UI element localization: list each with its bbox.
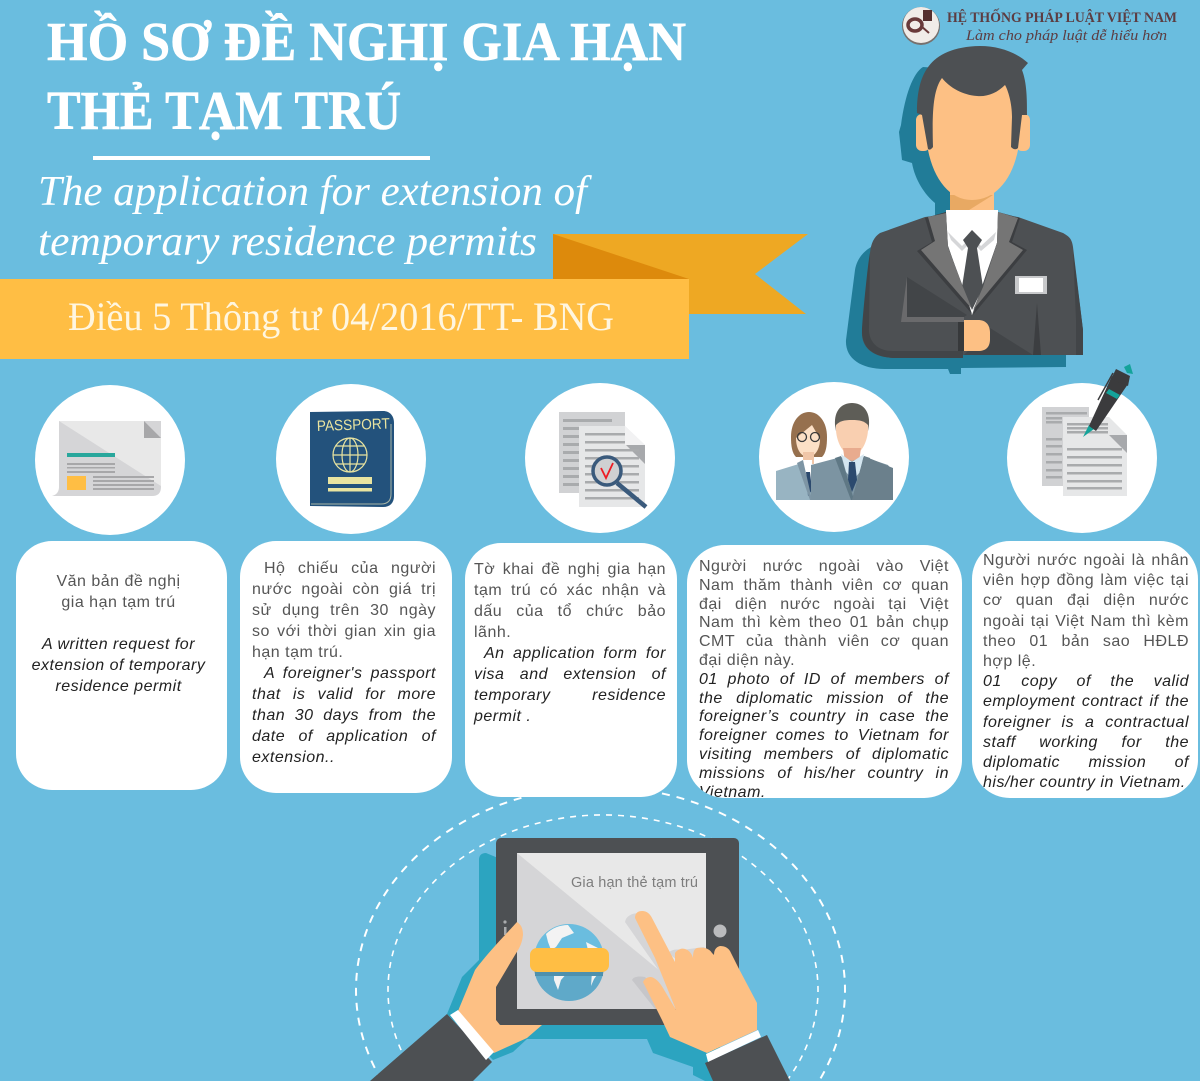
card 2 text: hạn tạm trú.: [252, 644, 343, 661]
passport booklet: PASSPORT: [317, 415, 390, 435]
card 5 text: ngoài tại Việt Nam thì kèm: [983, 613, 1189, 630]
man jacket: [862, 211, 1083, 358]
card 2 text: so với thời gian xin gia: [252, 623, 436, 640]
document: [52, 421, 161, 496]
card 2 text: date of application of: [252, 728, 436, 745]
card 4 text: CMT của thành viên cơ quan: [699, 633, 949, 650]
card 2 text: extension..: [252, 749, 335, 766]
card 4 text: Nam thì kèm theo 01 bản chụp: [699, 614, 949, 631]
icon circle 3: form with magnifier: [525, 383, 675, 533]
card 4 text: [699, 558, 950, 798]
back page: [1042, 407, 1089, 486]
magnifier: [593, 457, 646, 507]
card 3 text: temporary residence: [474, 687, 666, 704]
icon circle 4: two staff: [759, 382, 909, 532]
man shirt: [946, 210, 998, 315]
tablet caption: Gia hạn thẻ tạm trú: [571, 875, 698, 891]
card 2 text: [252, 560, 437, 766]
left cuff: [450, 1010, 494, 1060]
logo name: HỆ THỐNG PHÁP LUẬT VIỆT NAM: [947, 8, 1177, 26]
back page: [559, 412, 625, 493]
card 4 text: đại diện này.: [699, 652, 795, 669]
man shadow: [846, 67, 1066, 374]
card 2 text: Hộ chiếu của người: [264, 560, 436, 577]
card 5 text: Người nước ngoài là nhân: [983, 552, 1189, 569]
card 5: employment contract: [972, 541, 1198, 798]
right hand: [635, 911, 757, 1053]
card 1 text: Văn bản đề nghị: [56, 573, 181, 590]
tablet shadow: [447, 853, 720, 1081]
card 4 text: Người nước ngoài vào Việt: [699, 558, 949, 575]
ribbon band: [0, 279, 689, 359]
card 2 text: nước ngoài còn giá trị: [252, 581, 436, 598]
card 5 text: hợp lệ.: [983, 653, 1036, 670]
card 1 text: gia hạn tạm trú: [61, 594, 176, 611]
man neck: [950, 185, 994, 225]
card 4 text: the diplomatic mission of the: [699, 690, 949, 707]
subtitle: The application for extension of: [38, 169, 592, 215]
card 4 text: đại diện nước ngoài tại Việt: [699, 596, 949, 613]
card 1 text: A written request for: [42, 636, 195, 653]
front page: [1063, 417, 1127, 496]
man lapels: [917, 212, 1027, 315]
globe with yellow band: [530, 924, 609, 1001]
man tie: [962, 230, 983, 310]
card 3 text: dấu của tổ chức bảo: [474, 603, 666, 620]
card 5 text: foreigner is a contractual: [983, 714, 1189, 731]
card 3: application form: [465, 543, 677, 797]
card 4 text: missions of his/her country in: [699, 765, 949, 782]
card 5 text: his/her country in Vietnam.: [983, 774, 1186, 791]
illustration: tablet held by two hands: [355, 792, 846, 1081]
card 5 text: employment contract if the: [983, 693, 1189, 710]
card 3 text: Tờ khai đề nghị gia hạn: [474, 561, 666, 578]
card 5 text: [983, 552, 1190, 791]
title: HỒ SƠ ĐỀ NGHỊ GIA HẠN: [47, 11, 686, 72]
card 4 text: foreigner comes to Vietnam for: [699, 727, 949, 744]
finger shadows on screen: [625, 913, 710, 1009]
header: title, subtitle, ribbon: [0, 10, 808, 359]
man arm and hand: [901, 277, 1041, 355]
passport booklet: [310, 411, 394, 507]
card 3 text: [474, 561, 667, 725]
card 5 text: viên hợp đồng làm việc tại: [983, 572, 1189, 589]
man hair: [917, 46, 1028, 150]
right cuff: [706, 1030, 761, 1062]
man: [811, 403, 893, 500]
right sleeve: [705, 1035, 790, 1081]
card 4: photo of ID: [687, 545, 962, 798]
card 5 text: theo 01 bản sao HĐLĐ: [983, 633, 1189, 650]
man ears: [916, 114, 1030, 151]
card 5 text: diplomatic mission of: [983, 754, 1189, 771]
man badge: [1015, 276, 1047, 294]
card 3 text: permit .: [474, 708, 531, 725]
card 3 text: visa and extension of: [474, 666, 666, 683]
card 1: written request: [16, 541, 227, 790]
card 4 text: visiting members of diplomatic: [699, 746, 949, 763]
logo tagline: Làm cho pháp luật dễ hiểu hơn: [965, 28, 1167, 44]
pen: [1083, 364, 1133, 437]
card 4 text: Nam thăm thành viên cơ quan: [699, 577, 949, 594]
title: [47, 11, 686, 141]
card 2: passport: [240, 541, 452, 793]
card 2 text: sử dụng trên 30 ngày: [252, 602, 436, 619]
ribbon text: Điều 5 Thông tư 04/2016/TT- BNG: [68, 294, 614, 339]
title: THẺ TẠM TRÚ: [47, 80, 401, 141]
icon circle 5: signed documents and pen: [1007, 364, 1157, 533]
left hand: [458, 922, 542, 1053]
man face: [928, 75, 1018, 200]
illustration: businessman: [846, 46, 1083, 374]
card 4 text: 01 photo of ID of members of: [699, 671, 949, 688]
woman: [776, 412, 827, 500]
card 3 text: lãnh.: [474, 624, 511, 641]
card 2 text: A foreigner's passport: [264, 665, 436, 682]
subtitle: temporary residence permits: [38, 219, 537, 265]
card 5 text: staff working for the: [983, 734, 1189, 751]
card 5 text: 01 copy of the valid: [983, 673, 1189, 690]
card 2 text: than 30 days from the: [252, 707, 436, 724]
logo seal: [902, 7, 940, 45]
icon circle 2: passport: [276, 384, 426, 534]
tablet body: [496, 838, 739, 1025]
card 5 text: cơ quan đại diện nước: [983, 592, 1189, 609]
front page: [579, 426, 645, 507]
card 3 text: tạm trú có xác nhận và: [474, 582, 666, 599]
subtitle: [38, 169, 592, 265]
card 2 text: that is valid for more: [252, 686, 436, 703]
card 1 text: residence permit: [55, 678, 182, 695]
dashed signal rings: [356, 787, 845, 1081]
card 3 text: An application form for: [484, 645, 666, 662]
left sleeve: [370, 1014, 492, 1081]
card 1 text: extension of temporary: [32, 657, 205, 674]
card 4 text: foreigner’s country in case the: [699, 708, 949, 725]
logo: Hệ thống pháp luật Việt Nam: [902, 7, 1177, 45]
card 1 text: [32, 573, 206, 695]
icon circle 1: written request: [35, 385, 185, 535]
ribbon tail: [553, 234, 808, 314]
